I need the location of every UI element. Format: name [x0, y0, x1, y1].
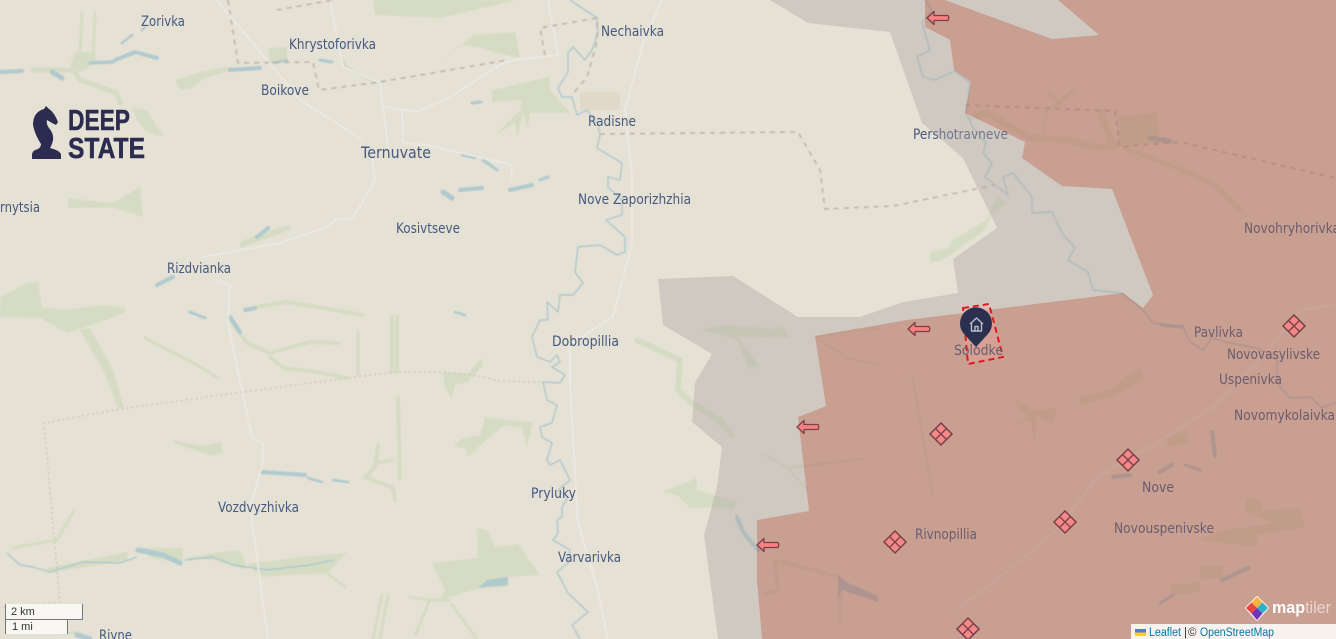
attribution text: OpenStreetMap — [1200, 627, 1274, 639]
label: Chernytsia fragment: rnytsia — [0, 200, 40, 216]
logo: Deep State — [32, 105, 145, 165]
maptiler wordmark: maptiler — [1272, 598, 1331, 617]
label: Ternuvate: Ternuvate — [360, 143, 431, 162]
arrow: advance 3 — [797, 420, 819, 434]
logo wordmark line 2: STATE — [68, 133, 145, 165]
label: Rivnopillia: Rivnopillia — [915, 527, 977, 543]
attribution text: | — [1184, 627, 1187, 639]
place labels — [0, 14, 1008, 639]
label: Novouspenivske: Novouspenivske — [1114, 521, 1214, 537]
marker: diamond 1 — [930, 423, 952, 445]
occupied red zone — [757, 0, 1336, 639]
label: Dobropillia: Dobropillia — [552, 334, 619, 350]
label: Pryluky: Pryluky — [531, 486, 576, 502]
label: Vozdvyzhivka: Vozdvyzhivka — [218, 500, 299, 516]
contested grey zone — [658, 0, 1153, 639]
attribution bar — [1131, 624, 1336, 639]
scale: 2 km: 2 km — [11, 606, 35, 618]
attribution text: © — [1188, 627, 1197, 639]
scale bar — [6, 604, 82, 634]
label: Kosivtseve: Kosivtseve — [396, 221, 460, 237]
label: Nechaivka: Nechaivka — [601, 24, 664, 40]
icon: Ukrainian flag — [1135, 629, 1146, 636]
labels in occupied zone — [915, 221, 1336, 543]
logo wordmark: DEEP — [68, 105, 130, 137]
label: Rizdvianka: Rizdvianka — [167, 261, 231, 277]
label: Nove Zaporizhzhia: Nove Zaporizhzhia — [578, 192, 691, 208]
marker: diamond 5 — [1283, 315, 1305, 337]
label: Pershotravneve: Pershotravneve — [913, 127, 1008, 143]
label: Solodke: Solodke — [954, 343, 1003, 359]
label: Boikove: Boikove — [261, 83, 309, 99]
label: Uspenivka: Uspenivka — [1219, 372, 1282, 388]
label: Radisne: Radisne — [588, 114, 636, 130]
label: Nove: Nove — [1142, 480, 1174, 496]
marker: diamond 4 — [884, 531, 906, 553]
icon: chess knight — [32, 106, 61, 159]
arrow: advance 4 — [757, 538, 779, 552]
label: Novovasylivske: Novovasylivske — [1227, 347, 1320, 363]
marker: diamond 2 — [1117, 449, 1139, 471]
label: Pavlivka: Pavlivka — [1194, 325, 1243, 341]
label: Zorivka: Zorivka — [141, 14, 185, 30]
map pin with house icon — [960, 307, 992, 347]
icon: maptiler diamond — [1246, 597, 1268, 620]
arrow: advance 1 — [927, 12, 949, 24]
label: Khrystoforivka: Khrystoforivka — [289, 37, 376, 53]
arrow: advance 2 — [908, 322, 930, 336]
marker: diamond 3 — [1054, 511, 1076, 533]
marker: diamond 6 — [957, 618, 979, 639]
scale: 1 mi: 1 mi — [12, 621, 33, 633]
label: Varvarivka: Varvarivka — [558, 550, 621, 566]
logo: MapTiler — [1246, 597, 1331, 620]
attribution text: Leaflet — [1149, 627, 1182, 639]
highlighted settlement outline: Solodke — [963, 304, 1003, 364]
